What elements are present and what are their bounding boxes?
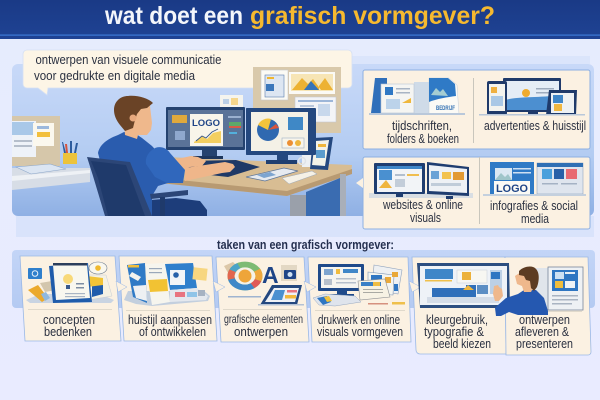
label: tijdschriften: folders & boeken — [387, 132, 459, 146]
icon: monitor and prints — [313, 264, 405, 311]
task 4: drukwerk en online — [304, 257, 411, 342]
right monitor with charts — [246, 108, 316, 164]
tasks band background — [12, 250, 595, 308]
bubble text: ontwerpen van visuele communicatie — [36, 52, 222, 67]
panel: media card top — [363, 70, 590, 149]
bubble text: voor gedrukte en digitale media — [34, 68, 196, 83]
icon: open brand manual — [124, 263, 210, 306]
speech bubble — [23, 50, 352, 95]
left monitor with logo: LOGO — [192, 118, 220, 129]
icon: websites — [369, 162, 473, 199]
task 3: grafische elementen — [213, 257, 309, 342]
main desk — [160, 157, 352, 216]
right monitor over corkboard — [246, 108, 316, 155]
designer figure — [98, 96, 235, 216]
icon: logo and social — [483, 162, 586, 196]
task 6 text: afleveren & — [515, 325, 570, 339]
task 5 text: beeld kiezen — [433, 337, 491, 351]
title: grafisch vormgever? — [250, 2, 495, 30]
icon: magazines and brochure: BEDRIJF — [436, 105, 455, 112]
task 4 text: drukwerk en online — [318, 313, 400, 327]
task 6 text: ontwerpen — [519, 313, 570, 327]
icon: ad screens — [479, 78, 585, 116]
designer trousers — [150, 198, 207, 216]
task 2: huisstijl aanpassen — [116, 256, 217, 341]
tasks heading: taken van een grafisch vormgever: — [217, 238, 394, 252]
label: tijdschriften: tijdschriften, — [392, 119, 452, 133]
icon: colour wheel, letter and tablet: A — [262, 262, 279, 288]
task 3 text: ontwerpen — [234, 325, 288, 339]
panel: media card bottom — [356, 157, 590, 229]
title: wat doet een — [104, 2, 243, 30]
icon: print on board — [535, 267, 583, 310]
keyboard and papers on desk — [186, 160, 317, 184]
icon: magazines and brochure — [369, 78, 465, 115]
task 3 text: grafische elementen — [224, 312, 303, 326]
icon: notebook with lightbulb — [26, 262, 114, 303]
task 1: concepten bedenken — [20, 256, 121, 341]
task 5 text: kleurgebruik, — [426, 313, 488, 327]
left monitor with logo — [166, 107, 245, 159]
task 5 text: typografie & — [424, 325, 485, 339]
task 5: kleurgebruik, typografie, beeld — [409, 257, 506, 354]
task 2 text: huistijl aanpassen — [128, 313, 212, 327]
task 6: ontwerpen afleveren — [500, 257, 591, 355]
left side desk with documents — [12, 116, 90, 190]
task 6 text: presenteren — [516, 337, 573, 351]
tablet and mug — [298, 137, 333, 170]
task 4 text: visuals vormgeven — [317, 325, 403, 339]
header bar — [0, 0, 600, 39]
icon: large screen with layout — [417, 263, 510, 308]
task 1 text: concepten — [43, 313, 95, 327]
label: websites: visuals — [410, 211, 441, 225]
hero illustration: designer at desk — [12, 95, 352, 216]
chair — [87, 157, 188, 216]
small print on wall — [220, 95, 243, 109]
task 2 text: of ontwikkelen — [139, 325, 206, 339]
label: websites: websites & online — [382, 198, 463, 212]
label: infografies: media — [521, 212, 549, 226]
icon: logo and social: LOGO — [496, 183, 528, 195]
corkboard with prints — [253, 67, 341, 133]
task 1 text: bedenken — [44, 325, 92, 339]
presenter figure — [493, 267, 548, 316]
label: infografies: infografies & social — [490, 199, 578, 213]
hero panel background — [12, 56, 594, 237]
